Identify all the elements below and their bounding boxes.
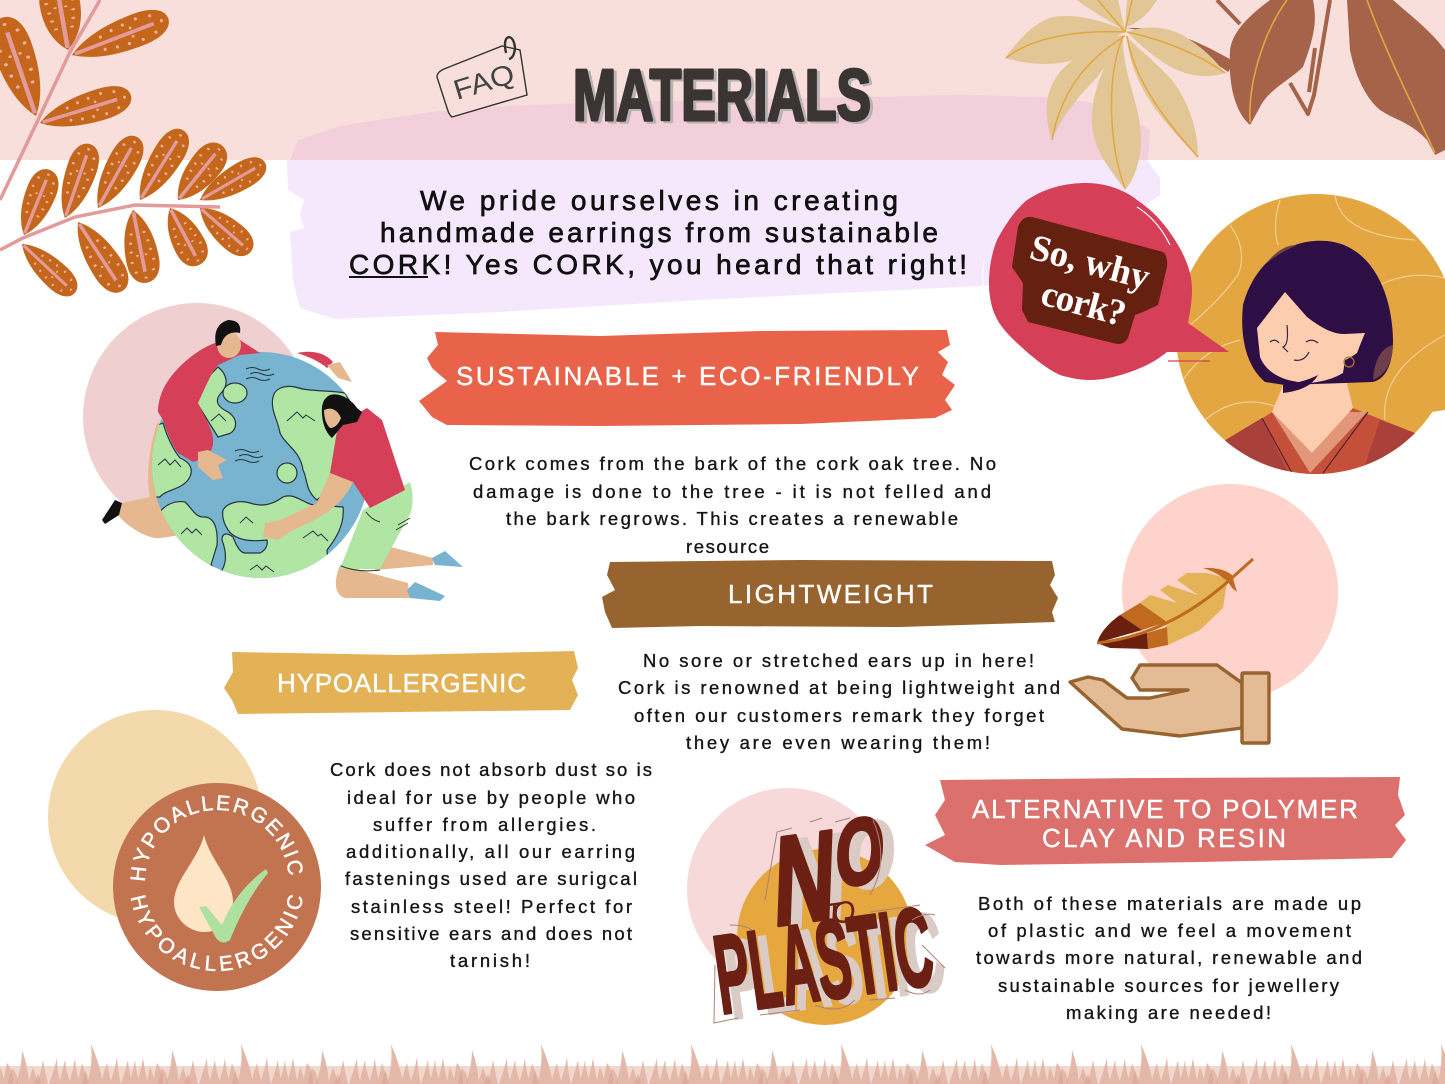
lettering: N [783,805,849,956]
intro text: handmade earrings from sustainable [380,217,938,248]
check mark [199,869,268,943]
orange circle [737,849,913,1025]
shirt [1227,408,1415,474]
pink backing circle [687,788,889,990]
intro text: CORK! Yes CORK, you heard that right! [349,249,967,280]
backing pink circle [1122,484,1338,700]
globe [140,320,463,601]
hair highlights [1265,245,1393,380]
text: hypoallergenic: suffer from allergies. [373,814,596,835]
lettering: N [772,802,838,953]
lettering: O [834,796,886,907]
badge disc [113,783,321,991]
intro text [349,185,967,280]
intro text: We pride ourselves in creating [420,185,898,216]
lettering: TO [822,895,858,932]
text: no plastic: sustainable sources for jewellery [998,975,1340,996]
cream backing circle [48,710,262,924]
title: MATERIALS [573,56,871,136]
icon: feather over hand [1070,484,1338,743]
text: lightweight [618,650,1060,753]
banner: hypoallergenic [224,651,578,714]
earring [1344,357,1354,367]
banner: sustainable + eco-friendly: SUSTAINABLE + ECO-FRIENDLY [456,361,919,391]
speech bubble: So, why [1026,227,1155,298]
brush: pink upper part behind title [290,95,1150,160]
chin shadow [1283,375,1318,393]
title: MATERIALS [576,58,874,138]
feather [1097,559,1253,649]
banner: alternative to polymer clay and resin: ALTERNATIVE TO POLYMER [972,794,1358,824]
text: no plastic: making are needed! [1066,1002,1271,1023]
man's leg and shoe [102,420,178,538]
text: cork renewable: resource [686,536,769,557]
circular labels: HYPOALLERGENIC [130,894,302,972]
lower-left branch with leaves [0,123,272,303]
banner: sustainable + eco-friendly [419,330,955,426]
man's torso and arm [158,340,333,462]
icon: FAQ tag [437,37,527,117]
illustration: couple hugging globe: PLASTIC [718,889,951,1043]
woman's arm [263,473,353,540]
text: no plastic: of plastic and we feel a movement [988,920,1351,941]
text: cork renewable: Cork comes from the bark of the cork oak tree. No [469,453,996,474]
top pink band [0,0,1445,160]
woman's shirt [330,408,405,508]
man's head [215,320,241,358]
banner: alternative to polymer clay and resin [925,777,1406,865]
man's hands [198,362,352,480]
circular labels [130,795,303,972]
face [1257,292,1365,383]
icon: hypoallergenic badge [48,710,321,991]
woman's shorts [340,482,413,569]
illustration: couple hugging globe: PLASTIC [707,884,940,1038]
text: cork renewable [469,453,996,557]
text: hypoallergenic: stainless steel! Perfect for [351,896,632,917]
text: hypoallergenic: sensitive ears and does not [350,923,632,944]
top-left branch with leaves [0,0,174,200]
text: hypoallergenic [330,759,652,971]
brush: lilac intro panel [287,160,1160,319]
text: hypoallergenic: additionally, all our earring [346,841,635,862]
text: hypoallergenic: Cork does not absorb dust so is [330,759,652,780]
illustration: woman portrait [1176,194,1445,480]
illustration: no to plastic lettering [687,788,951,1043]
banner: alternative to polymer clay and resin: CLAY AND RESIN [1042,823,1286,853]
woman's head and hair [322,394,362,438]
text: lightweight: Cork is renowned at being lightweight and [618,677,1060,698]
top-right beige leaves [1005,0,1225,190]
neck [1272,375,1353,453]
circular labels: HYPOALLERGENIC [130,795,303,881]
orange circle [1176,194,1445,474]
top-right brown leaves [1127,0,1445,155]
sketch lines [714,818,945,1023]
banner: lightweight: LIGHTWEIGHT [728,579,933,609]
woman's legs and shoes [336,545,463,601]
speech bubble: cork? [1037,273,1130,335]
text: no plastic: towards more natural, renewable and [976,947,1362,968]
text: hypoallergenic: tarnish! [450,950,530,971]
text: no plastic: Both of these materials are made up [978,893,1361,914]
smile and eyes [1270,325,1318,360]
lettering: O [845,799,897,910]
grass strip [0,1044,1445,1084]
text: lightweight: No sore or stretched ears up in here! [643,650,1034,671]
text: lightweight: they are even wearing them! [686,732,990,753]
banner: hypoallergenic: HYPOALLERGENIC [277,668,526,698]
background swirls [1180,195,1445,420]
backing pink circle [83,303,311,531]
hair back [1242,241,1393,385]
icon: FAQ tag: FAQ [450,58,518,106]
speech bubble [983,183,1229,380]
drop [174,835,233,932]
hand [1070,665,1242,736]
collar [1272,412,1367,473]
text: cork renewable: damage is done to the tree - it is not felled and [473,481,991,502]
text: hypoallergenic: fastenings used are surigcal [345,868,637,889]
text: lightweight: often our customers remark they forget [634,705,1044,726]
cuff [1242,673,1269,743]
text: no plastic [976,893,1362,1023]
text: cork renewable: the bark regrows. This creates a renewable [506,508,958,529]
text: hypoallergenic: ideal for use by people who [347,787,635,808]
shorts hem lines [341,512,410,571]
banner: lightweight [602,560,1058,628]
lettering [707,796,951,1043]
